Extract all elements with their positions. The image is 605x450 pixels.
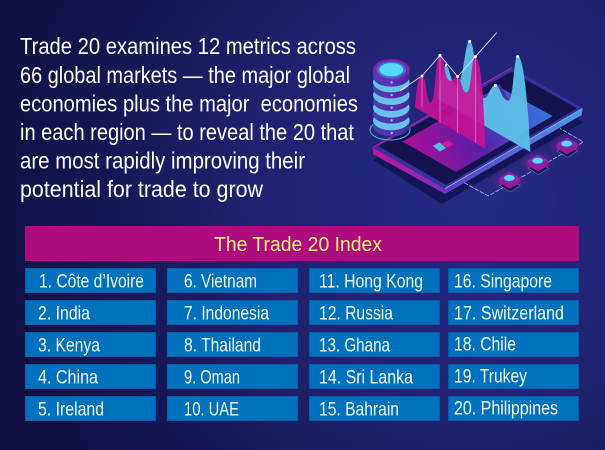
index column 1: 5. Ireland [38, 398, 104, 420]
intro text: in each region — to reveal the 20 that [20, 119, 355, 145]
tablet top frame [373, 68, 583, 189]
intro text: Trade 20 examines 12 metrics across [20, 33, 356, 59]
index column 2 [168, 268, 298, 420]
index column 1: 4. China [38, 366, 98, 388]
illustration: isometric tablet with charts and database [370, 33, 585, 204]
index column 4: 18. Chile [454, 334, 516, 356]
intro text: 66 global markets — the major global [20, 62, 350, 88]
tablet side right [445, 108, 583, 194]
index column 4 [448, 268, 578, 420]
index column 2: 7. Indonesia [184, 302, 269, 324]
connector lines [464, 128, 583, 196]
index column 3: 13. Ghana [319, 334, 390, 356]
index column 3: 11. Hong Kong [319, 270, 423, 292]
index column 4: 16. Singapore [454, 270, 552, 292]
intro text: potential for trade to grow [20, 176, 263, 202]
index column 1 [26, 268, 156, 420]
index column 3: 15. Bahrain [319, 398, 399, 420]
index column 4: 19. Trukey [454, 366, 527, 388]
index column 2: 8. Thailand [184, 334, 261, 356]
index column 4: 17. Switzerland [454, 302, 564, 324]
index column 3: 14. Sri Lanka [319, 366, 413, 388]
tablet screen [378, 72, 577, 185]
intro text: economies plus the major economies [20, 90, 358, 116]
database stack [370, 59, 410, 140]
index header [25, 226, 579, 261]
tablet shadow [373, 117, 584, 204]
index column 2: 6. Vietnam [184, 270, 257, 292]
index column 3 [310, 268, 440, 420]
magenta chart [415, 55, 485, 149]
purple back hill [483, 84, 510, 101]
index column 4: 20. Philippines [454, 398, 558, 420]
screen icon [433, 140, 454, 152]
index column 1: 1. Côte d’Ivoire [39, 270, 144, 292]
trend line with data points [400, 33, 519, 143]
screen display [403, 87, 553, 172]
index column 1: 2. India [38, 302, 90, 324]
index column 2: 9. Oman [184, 366, 240, 388]
tablet side left [373, 148, 445, 194]
index column 3: 12. Russia [319, 302, 393, 324]
intro text [20, 33, 358, 202]
index column 2: 10. UAE [184, 398, 239, 420]
index column 1: 3. Kenya [38, 334, 100, 356]
index header: The Trade 20 Index [214, 234, 382, 256]
intro text: are most rapidly improving their [20, 148, 305, 174]
chip nodes [490, 133, 585, 193]
cyan chart [437, 41, 530, 152]
